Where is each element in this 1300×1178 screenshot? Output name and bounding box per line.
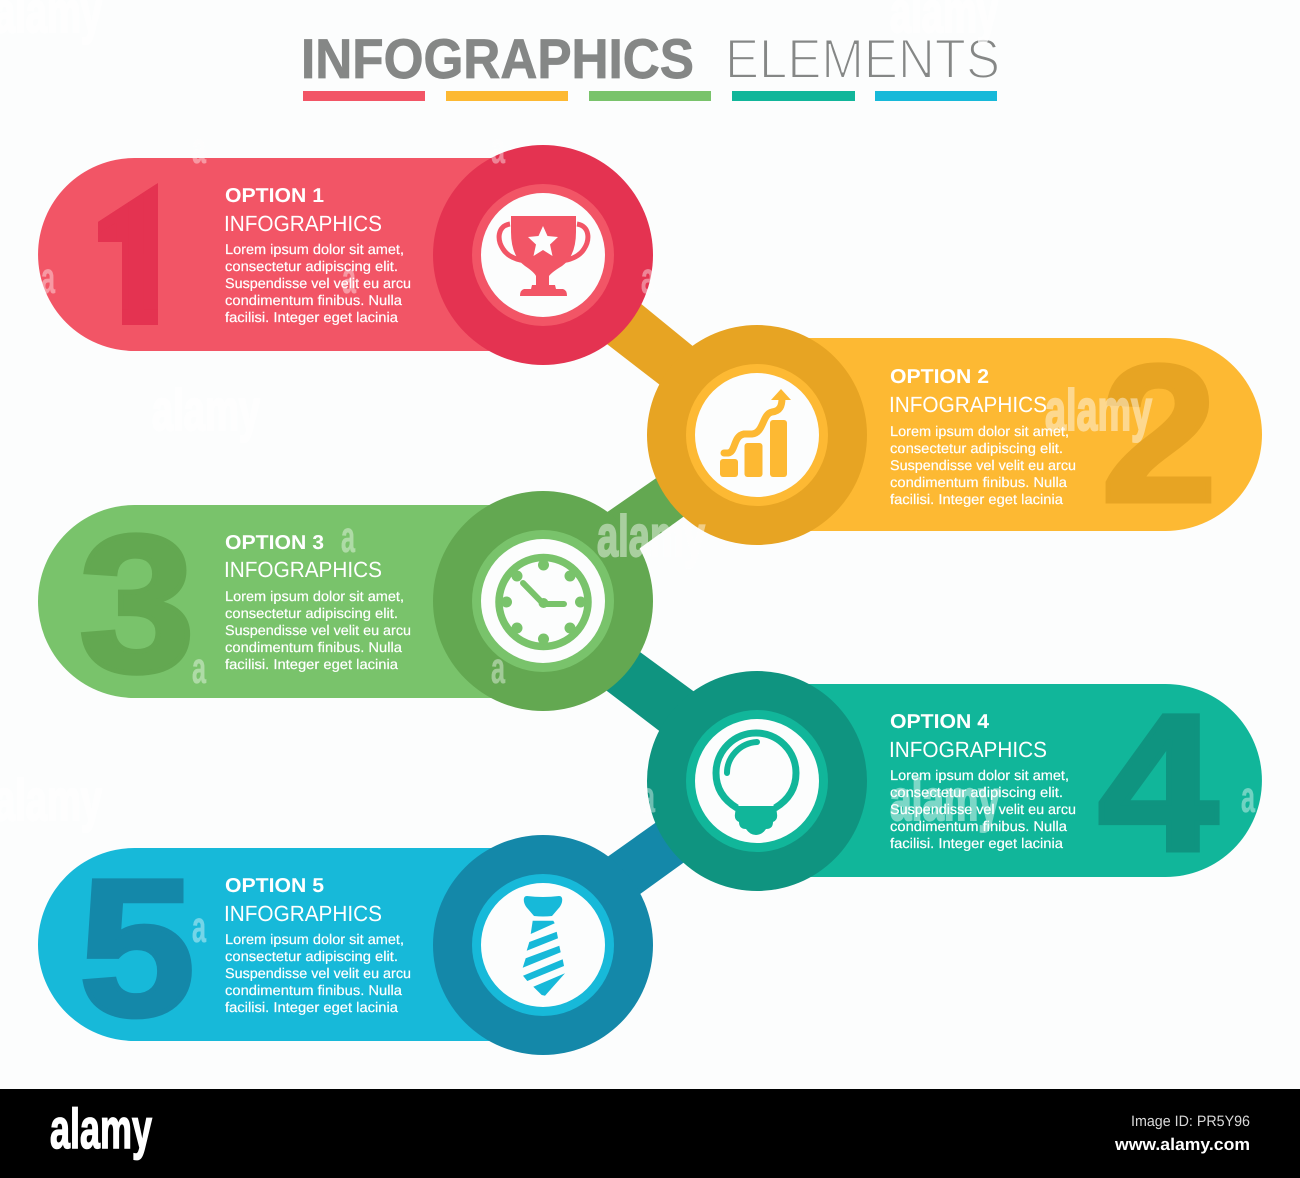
icon: light bulb	[716, 733, 796, 835]
watermarks: a	[491, 124, 505, 173]
text block 4: INFOGRAPHICS	[889, 737, 1047, 762]
colour bars under title	[303, 91, 997, 101]
text block 1: facilisi. Integer eget lacinia	[225, 309, 398, 325]
circle badge 3	[433, 491, 653, 711]
text block 3: OPTION 3	[225, 532, 324, 554]
text block 3: condimentum finibus. Nulla	[225, 639, 402, 655]
panel: option 1	[38, 145, 653, 365]
text block 4: Lorem ipsum dolor sit amet,	[890, 767, 1069, 783]
number 1	[98, 183, 158, 325]
watermarks: a	[192, 644, 206, 693]
watermarks: a	[641, 254, 655, 303]
text block 3: Lorem ipsum dolor sit amet,	[225, 588, 404, 604]
text block 5: Lorem ipsum dolor sit amet,	[225, 931, 404, 947]
text block 3: consectetur adipiscing elit.	[225, 605, 398, 621]
connector: option 1 to 2	[603, 303, 700, 385]
connector: option 2 to 3	[603, 472, 690, 551]
text block 2: condimentum finibus. Nulla	[890, 474, 1067, 490]
icon: necktie	[523, 896, 565, 996]
watermarks: a	[192, 124, 206, 173]
panel: option 3	[38, 491, 653, 713]
number 2: 2	[1101, 325, 1217, 543]
text block 3: facilisi. Integer eget lacinia	[225, 656, 398, 672]
connector: option 4 to 5	[603, 816, 690, 897]
text block 5: consectetur adipiscing elit.	[225, 948, 398, 964]
text block 1: condimentum finibus. Nulla	[225, 292, 402, 308]
text block 5: Suspendisse vel velit eu arcu	[225, 965, 411, 981]
circle badge 5	[433, 835, 653, 1055]
text block 1: INFOGRAPHICS	[224, 211, 382, 236]
panel: option 2	[647, 325, 1262, 545]
watermarks	[0, 0, 1255, 952]
text block 2	[889, 366, 1076, 507]
text block 3	[224, 532, 411, 672]
text block 1: OPTION 1	[225, 185, 324, 207]
text block 3: Suspendisse vel velit eu arcu	[225, 622, 411, 638]
footer bar	[0, 1089, 1300, 1178]
watermarks: alamy	[1045, 378, 1152, 443]
text block 2: Suspendisse vel velit eu arcu	[890, 457, 1076, 473]
text block 1: Lorem ipsum dolor sit amet,	[225, 241, 404, 257]
watermarks: a	[641, 773, 655, 822]
circle badge 4	[647, 671, 867, 891]
text block 2: OPTION 2	[890, 366, 989, 388]
panel: option 4	[647, 671, 1262, 892]
watermarks: alamy	[152, 378, 260, 443]
watermarks: a	[1241, 773, 1255, 822]
watermarks: alamy	[597, 504, 705, 569]
text block 1: consectetur adipiscing elit.	[225, 258, 398, 274]
text block 5: OPTION 5	[225, 875, 324, 897]
title: INFOGRAPHICS	[301, 27, 694, 90]
watermarks: a	[491, 644, 505, 693]
footer logo: alamy	[50, 1097, 152, 1160]
watermarks: a	[341, 513, 355, 562]
connector: option 3 to 4	[603, 652, 700, 733]
number 4: 4	[1098, 674, 1218, 892]
text block 2: consectetur adipiscing elit.	[890, 440, 1063, 456]
text block 5: condimentum finibus. Nulla	[225, 982, 402, 998]
watermarks: a	[342, 254, 356, 303]
text block 4	[889, 711, 1076, 851]
circle badge 2	[647, 325, 867, 545]
icon: trophy	[499, 216, 588, 296]
watermarks: a	[41, 254, 55, 303]
text block 2: Lorem ipsum dolor sit amet,	[890, 423, 1069, 439]
circle badge 1	[433, 145, 653, 365]
image id: Image ID: PR5Y96	[1131, 1113, 1250, 1130]
text block 5: facilisi. Integer eget lacinia	[225, 999, 398, 1015]
number 1: 1	[76, 147, 187, 365]
text block 4: Suspendisse vel velit eu arcu	[890, 801, 1076, 817]
text block 4: condimentum finibus. Nulla	[890, 818, 1067, 834]
text block 1	[224, 185, 411, 325]
number 3: 3	[79, 495, 195, 713]
icon: clock	[499, 558, 588, 646]
title	[301, 27, 1000, 90]
text block 5: INFOGRAPHICS	[224, 901, 382, 926]
text block 4: facilisi. Integer eget lacinia	[890, 835, 1063, 851]
text block 4: OPTION 4	[890, 711, 990, 733]
text block 3: INFOGRAPHICS	[224, 557, 382, 582]
text block 2: facilisi. Integer eget lacinia	[890, 491, 1063, 507]
watermarks: alamy	[890, 768, 1000, 833]
title: ELEMENTS	[725, 27, 1000, 90]
panel: option 5	[38, 835, 653, 1057]
text block 2: INFOGRAPHICS	[889, 392, 1047, 417]
text block 5	[224, 875, 411, 1015]
icon: rising bar chart	[720, 389, 791, 477]
website: www.alamy.com	[1114, 1135, 1250, 1154]
watermarks: a	[192, 903, 206, 952]
text block 1: Suspendisse vel velit eu arcu	[225, 275, 411, 291]
number 5: 5	[79, 839, 195, 1057]
text block 4: consectetur adipiscing elit.	[890, 784, 1063, 800]
